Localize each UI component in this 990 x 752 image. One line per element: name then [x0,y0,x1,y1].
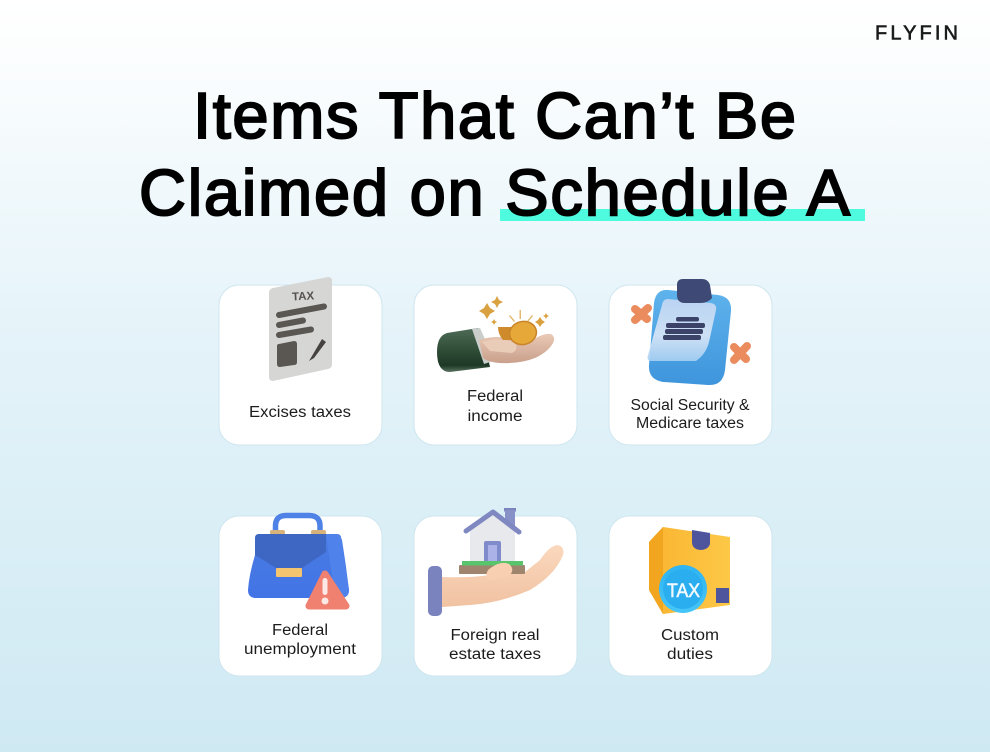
icon: tax document [269,277,332,381]
icon: handbag with warning [248,516,349,606]
icon: tax document: TAX [292,290,315,303]
card: federal unemployment [219,516,382,676]
title line 1: Items That Can’t Be [193,79,796,152]
card: federal unemployment: unemployment [244,641,357,658]
label: Custom [661,627,719,644]
icon: box with tax coin [649,527,730,614]
label: Foreign real [450,627,540,644]
card: foreign real estate taxes [414,508,577,676]
card: foreign real estate taxes: estate taxes [449,646,541,663]
card: custom duties: duties [667,646,713,663]
label: Excises taxes [249,404,351,421]
title line 2: Claimed on Schedule A [139,156,851,229]
icon: hand holding coins [437,296,554,372]
icon: box with tax coin: TAX [667,581,700,602]
title [139,79,865,229]
icon: hand holding house [428,508,563,616]
card: federal income [414,285,577,445]
card: custom duties [609,516,772,676]
card: social security and medicare taxes [609,279,772,445]
card: excise taxes [219,277,382,445]
card: social security and medicare taxes: Medicare taxes [636,415,744,432]
label: Federal [272,622,328,639]
label: Federal [467,388,523,405]
logo: FLYFIN [875,22,958,44]
label: Social Security & [630,397,750,414]
icon: clipboard [635,279,747,385]
card: federal income: income [468,408,522,425]
title underline highlight [500,209,865,221]
